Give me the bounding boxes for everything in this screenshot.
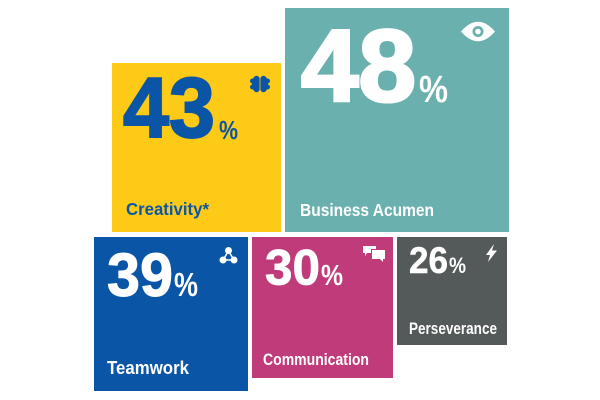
panel: teamwork [94,237,248,391]
business acumen label: Business Acumen [300,200,434,220]
icon: brain [250,75,270,93]
perseverance percentage: 26 [409,240,448,281]
business acumen percentage: % [419,69,448,111]
communication label: Communication [263,351,369,369]
business acumen percentage: 48 [301,9,416,123]
teamwork label: Teamwork [107,358,190,378]
icon: lightning bolt [486,244,497,262]
teamwork percentage: % [174,266,198,303]
icon: eye [461,22,495,41]
panel: business acumen [285,8,509,232]
perseverance percentage: % [449,253,466,278]
panel: communication [252,237,393,378]
icon: network nodes [220,247,238,264]
creativity label: Creativity* [126,199,209,219]
teamwork percentage: 39 [107,241,173,309]
icon: speech bubbles [363,246,385,262]
communication percentage: 30 [265,240,320,296]
communication percentage: % [321,260,343,292]
panel: creativity [112,61,281,232]
creativity percentage: % [219,115,238,145]
perseverance label: Perseverance [409,320,497,338]
creativity percentage: 43 [123,61,215,156]
panel: perseverance [397,237,507,345]
